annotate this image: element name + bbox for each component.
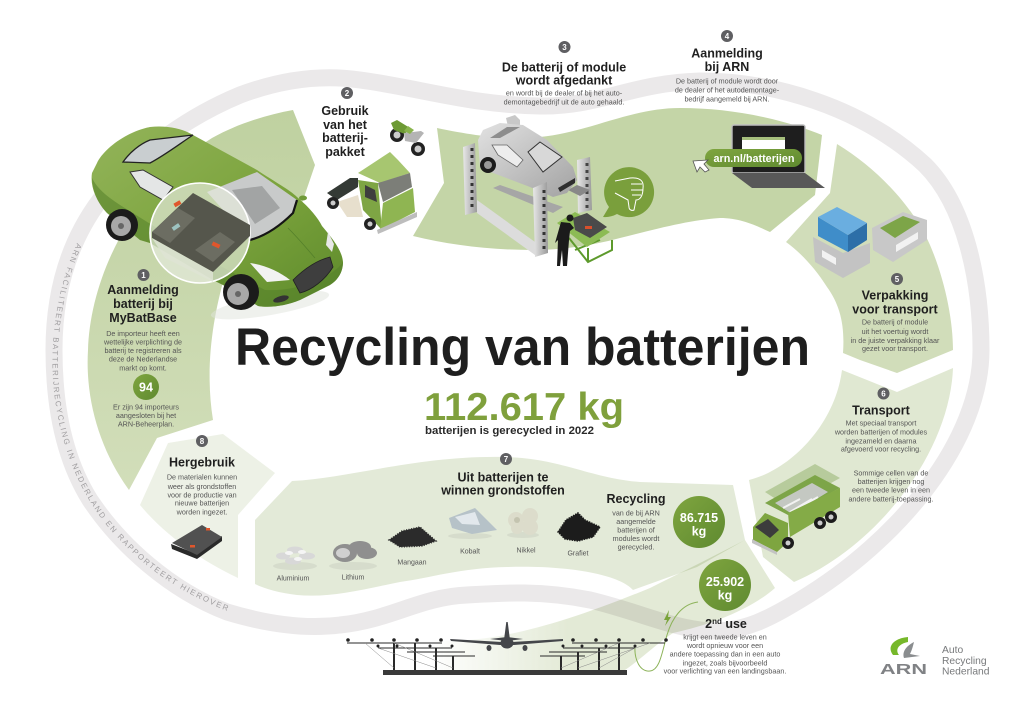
body 8: nieuwe batterijen [175,498,229,508]
cover [765,464,840,507]
heading 1: batterij bij [113,297,173,311]
lens circle [150,183,250,283]
floor plate [477,200,535,255]
table top [557,212,610,247]
2nd use heading: 2 [705,617,712,631]
heading 4: Aanmelding [691,46,763,60]
number badge 1: 1 [141,271,146,280]
recycling heading: Recycling [606,492,666,506]
stat circle recycling: kg [692,524,706,538]
number badge 8: 8 [200,437,205,446]
cab [753,513,788,552]
heading 4: bij ARN [705,60,749,74]
cab side [358,180,382,230]
mineral: nikkel [507,508,539,554]
right post [577,157,592,213]
2nd use heading: use [722,617,747,631]
number badge 6: 6 [881,390,886,398]
second lift arm [568,185,590,196]
2nd use heading: nd [712,617,722,626]
body 5: uit het voertuig wordt [862,327,928,336]
mirror [299,196,307,200]
panel 2nd use background [430,540,775,670]
car grille [558,178,575,192]
logo ARN: ARN [880,661,927,678]
left post hatch [470,148,474,208]
grille [293,257,333,293]
blue box top [818,207,867,235]
rear window [490,127,520,138]
battery in car [152,193,250,282]
body 8: weer als grondstoffen [167,482,236,491]
crate contents [880,216,920,238]
icon: laptop with URL [693,125,825,188]
cursor [693,160,709,172]
body 1: markt op komt. [119,364,167,372]
body 5: De batterij of module [862,318,928,326]
2nd use body: wordt opnieuw voor een [686,641,763,650]
heading 3: wordt afgedankt [515,74,613,88]
rear window [123,135,193,163]
icon: motorcycle [390,120,425,156]
seats [232,186,280,224]
mineral: grafiet: Grafiet [567,550,589,558]
windscreen [207,172,297,240]
rear wheel [106,209,138,241]
icon: car lift with grey car [463,115,592,257]
mineral: mangaan: Mangaan [397,560,427,566]
heading 6: Transport [852,404,911,418]
step 1: car with battery [92,127,343,325]
car body [92,127,343,307]
body 1: wettelijke verplichting de [103,338,182,346]
side headlight [326,232,334,252]
body 6b: batterijen krijgen nog [858,477,924,486]
heading 5: Verpakking [862,288,928,302]
grille [380,188,415,230]
ground [383,670,627,675]
heading 8: Hergebruik [169,456,235,470]
body 5: in de juiste verpakking klaar [851,336,940,345]
windscreen [528,142,562,172]
icon: runway lights with plane [346,622,668,675]
icon: packaging boxes [813,207,927,278]
number badge 2: 2 [345,89,350,98]
bed side [788,488,840,537]
right post hatch [586,163,588,208]
step 5 text [851,273,940,353]
body 6b: andere batterij-toepassing. [848,494,934,504]
body 4: de dealer of het autodemontage- [675,86,780,94]
logo name: Recycling [942,656,987,667]
plane [450,622,563,651]
person [555,214,574,266]
body 8: voor de productie van [167,490,237,500]
panel 5 background [786,144,953,373]
step 4 text [675,30,780,104]
cell ribs [783,497,818,512]
total caption: batterijen is gerecycled in 2022 [425,425,594,437]
cab roof [358,152,410,183]
headlight [250,263,290,282]
recycling body: batterijen of [617,526,655,534]
body 6: Met speciaal transport [846,418,916,428]
mineral: nikkel: Nikkel [516,548,536,554]
body 3: en wordt bij de dealer of bij het auto- [506,88,623,98]
logo name: Nederland [942,666,990,678]
stat circle 2nd use: 25.902 [706,575,744,589]
number badge 7: 7 [504,455,509,464]
mineral: lithium: Lithium [342,574,364,582]
2nd use body: ingezet, zoals bijvoorbeeld [683,658,767,668]
screen [732,125,805,173]
url pill [705,149,802,167]
number badge 4: 4 [725,32,730,41]
body 1: De importeur heeft een [106,329,180,338]
number badge 5: 5 [895,275,900,284]
body 8: worden ingezet. [176,508,227,516]
2nd use body: krijgt een tweede leven en [683,632,767,642]
body 6: ingezameld en daarna [845,436,917,446]
grey car [478,123,577,197]
blue box side [848,223,867,252]
body 1: deze de Nederlandse [109,354,177,364]
bumper [377,212,417,234]
step 6 text [834,388,934,504]
front wheel [223,274,259,310]
heading 2: Gebruik [321,104,369,118]
recycling body: aangemelde [616,517,656,526]
crate under blue box [813,237,870,278]
total amount: 112.617 kg [424,386,624,429]
step 2 text [321,87,369,159]
panel 6 background [749,368,953,582]
number badge 3: 3 [562,43,567,52]
crate window [896,232,918,252]
battery [573,213,607,238]
panel 7 background [255,457,745,596]
open crate [872,212,927,262]
bumper [752,539,777,555]
car lower shade [92,178,343,307]
fog lamp [272,294,290,304]
body 4: bedrijf aangemeld bij ARN. [684,94,770,104]
posts [394,643,619,670]
step 3 text [502,41,626,106]
step 7 text [440,453,565,498]
blue box front [818,217,848,252]
2nd use body: voor verlichting van een landingsbaan. [664,666,786,676]
recycling body: van de bij ARN [612,508,660,518]
icon: laptop with URL: arn.nl/batterijen [714,153,794,165]
panel 2-4 background [413,108,822,250]
body 4: De batterij of module wordt door [676,76,779,86]
2nd use text [664,617,786,676]
heading 5: voor transport [852,302,939,316]
windscreen [755,519,779,538]
body 3: demontagebedrijf uit de auto gehaald. [504,98,624,106]
stat circle recycling: 86.715 [680,511,718,525]
left post [463,143,477,215]
stat circle 2nd use: kg [718,588,732,602]
mineral: grafiet [558,513,600,558]
body 1b: ARN-Beheerplan. [118,420,174,428]
light bars [347,643,665,656]
step 8 text [167,435,237,516]
icon: truck cab [327,152,417,234]
icon: thumbs down bubble [603,167,654,217]
mineral: aluminium [273,546,317,582]
stat circle 2nd use [699,559,751,611]
bonnet line [288,228,315,258]
heading 7: Uit batterijen te [458,470,549,484]
logo name: Auto [942,645,963,656]
heading 2: batterij- [322,131,368,145]
car shadow [209,285,331,325]
window [742,137,785,159]
windscreen lower edge [250,200,297,240]
lift arm [493,185,563,213]
body 6b: een tweede leven in een [852,486,930,494]
ARN logo [880,637,990,678]
heading 2: pakket [325,145,366,159]
stat circle recycling [673,496,725,548]
number badge 1 [138,269,150,281]
body 6: worden batterijen of modules [834,428,928,436]
table legs [569,238,612,262]
side window [365,185,377,202]
front post [533,182,548,257]
base [732,173,825,188]
side windows [492,145,523,167]
logo mark [891,637,920,658]
2nd use body: andere toepassing dan in een auto [670,650,780,658]
stat circle 94: 94 [139,380,153,394]
back post [506,115,520,135]
recycling body: gerecycled. [618,542,654,552]
mineral: mangaan [389,527,436,566]
lamps [346,638,668,648]
deck [337,195,363,217]
recycling text [606,492,666,552]
chassis [327,178,358,200]
cells [775,483,828,514]
icon: green power cable [635,602,698,671]
body 6: afgevoerd voor recycling. [841,444,921,454]
icon: worker and battery table [555,212,612,266]
mineral: kobalt [448,508,497,556]
panel 1 background [88,110,315,490]
crate label [822,250,836,265]
step 1 text [103,269,182,428]
heading 7: winnen grondstoffen [440,484,565,498]
heading 2: van het [323,118,368,132]
icon: reused battery [171,525,222,559]
heading 1: MyBatBase [109,311,177,325]
heading 1: Aanmelding [107,283,179,297]
front post hatch [542,190,546,250]
body 5: gezet voor transport. [862,344,928,353]
grey loop band [54,78,981,631]
body 6b: Sommige cellen van de [854,468,928,478]
body 1: batterij te registreren als [104,346,182,355]
windscreen [378,173,412,202]
body 1b: Er zijn 94 importeurs [113,402,179,412]
bed interior [765,475,840,515]
recycling body: modules wordt [613,534,659,543]
panel 8 background [140,434,275,578]
mineral: aluminium: Aluminium [277,576,310,582]
stat circle 94 [133,374,159,400]
mineral: lithium [329,541,377,582]
body 8: De materialen kunnen [167,472,237,482]
side window [130,170,173,200]
body 1b: aangesloten bij het [116,411,176,420]
car wheel [480,157,496,173]
mineral: kobalt: Kobalt [460,548,480,556]
loop caption: ARN FACILITEERT BATTERIJRECYCLING IN NEDERLAND EN RAPPORTEERT HIEROVER [52,243,228,611]
braces [365,643,650,668]
heading 3: De batterij of module [502,60,626,74]
title: Recycling van batterijen [235,318,810,377]
icon: transport truck [752,464,840,555]
